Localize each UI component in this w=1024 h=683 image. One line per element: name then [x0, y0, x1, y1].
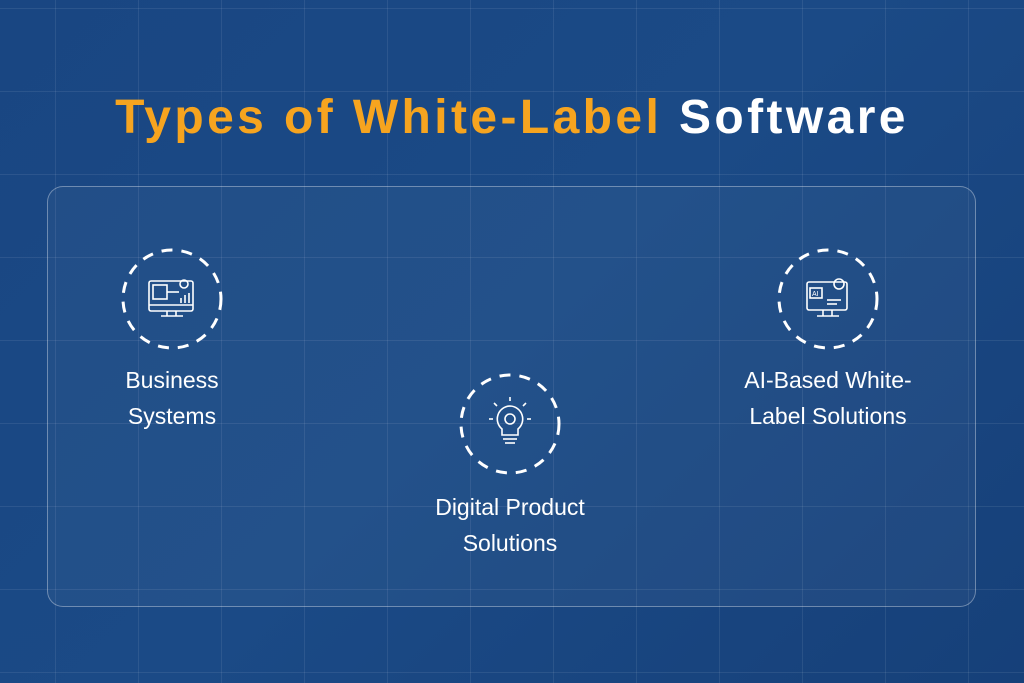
label: AI-Based White-	[744, 367, 912, 393]
item: digital product solutions	[435, 374, 585, 556]
icon: AI monitor: AI	[812, 291, 819, 298]
item: AI-based solutions	[744, 248, 912, 429]
icon: lightbulb gear	[460, 374, 560, 474]
label: Systems	[128, 403, 216, 429]
title: Types of White-Label Software	[115, 91, 909, 144]
item: business systems	[122, 248, 222, 429]
label	[744, 367, 912, 429]
label	[435, 494, 585, 556]
label: Solutions	[463, 530, 557, 556]
label: Business	[125, 367, 219, 393]
icon: AI monitor	[778, 248, 878, 350]
panel	[47, 186, 976, 607]
label: Digital Product	[435, 494, 585, 520]
icon: monitor dashboard	[122, 248, 222, 350]
label	[125, 367, 219, 429]
label: Label Solutions	[749, 403, 907, 429]
